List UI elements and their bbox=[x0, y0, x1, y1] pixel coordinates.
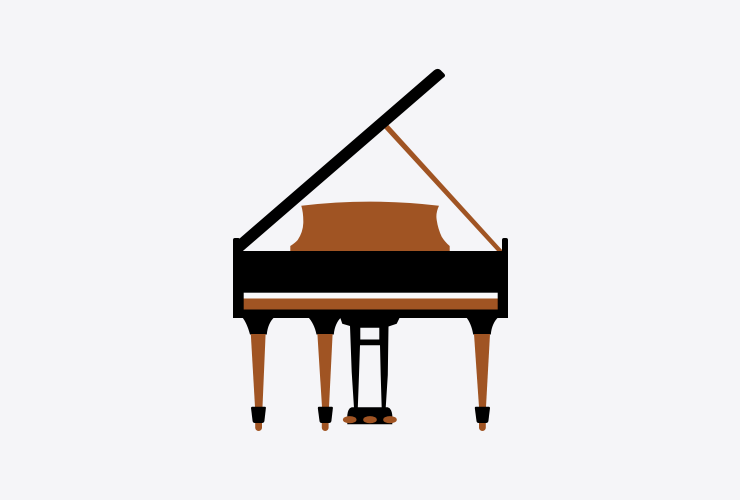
front left leg bbox=[242, 317, 274, 431]
pedal lyre bbox=[340, 317, 400, 424]
middle leg bbox=[308, 317, 342, 431]
leg tip bbox=[479, 420, 486, 431]
right pedal bbox=[383, 416, 397, 423]
caster cup bbox=[251, 407, 266, 423]
leg tip bbox=[322, 420, 329, 431]
leg shaft bbox=[474, 334, 490, 407]
leg shaft bbox=[317, 334, 333, 407]
case body with side posts bbox=[233, 238, 508, 318]
caster cup bbox=[318, 407, 333, 423]
leg shaft bbox=[251, 334, 266, 407]
raised lid bbox=[239, 69, 445, 252]
music desk bbox=[290, 202, 450, 252]
brown key slip bbox=[244, 298, 498, 310]
leg capital bbox=[308, 317, 342, 334]
white keyboard strip bbox=[244, 293, 498, 298]
caster cup bbox=[475, 407, 490, 423]
grand piano bbox=[233, 69, 508, 431]
lid prop stick bbox=[384, 125, 503, 251]
piano case bbox=[233, 238, 508, 318]
lyre frame bbox=[340, 317, 400, 408]
left pedal bbox=[343, 416, 357, 423]
right leg bbox=[466, 317, 498, 431]
leg tip bbox=[255, 420, 262, 431]
centre pedal bbox=[363, 416, 377, 423]
leg capital bbox=[466, 317, 498, 334]
pedal box bbox=[347, 407, 392, 424]
leg capital bbox=[242, 317, 274, 334]
